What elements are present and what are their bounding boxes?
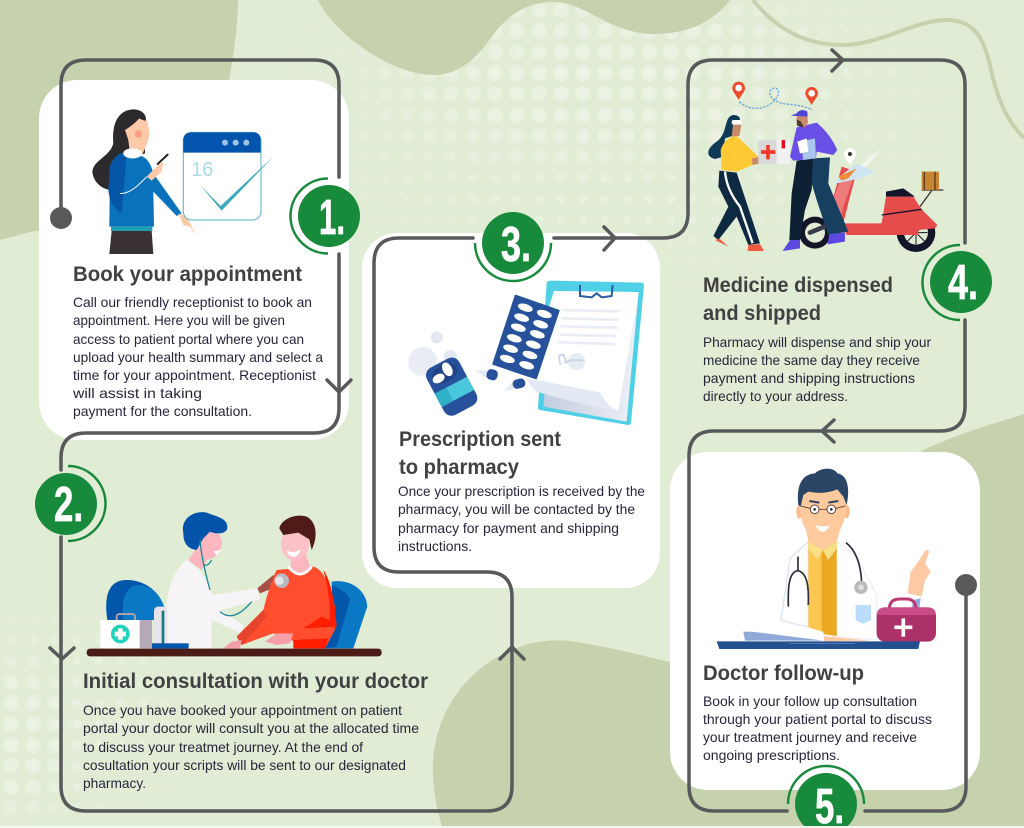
arrow: up to prescription	[500, 647, 524, 659]
panel: step 3 prescription sent to pharmacy	[362, 233, 660, 588]
heading: medicine dispensed and shipped: and shipped	[703, 302, 821, 325]
text: step 4 description: payment and shipping instructions	[703, 371, 915, 386]
text: step 1 description	[72, 295, 323, 419]
icon: doctor examining patient at desk	[87, 512, 382, 656]
badge: step 3: 3.	[501, 218, 531, 272]
text: step 2 description: to discuss your treatmet journey. At the end of	[83, 740, 363, 755]
path end dot	[955, 574, 977, 596]
arrow: step 1 to step 2	[327, 380, 351, 392]
panel: step 1 book your appointment	[39, 80, 349, 440]
text: step 1 description: upload your health summary and select a	[73, 350, 323, 365]
text: step 5 description: your treatment journey and receive	[703, 730, 917, 745]
text: step 1 description: will assist in taking	[72, 386, 202, 401]
badge: step 4: 4.	[948, 256, 978, 310]
text: step 3 description: pharmacy, you will be contacted by the	[398, 502, 635, 517]
arrow: right along step 4	[832, 50, 843, 71]
heading: book your appointment: Book your appointment	[73, 263, 302, 286]
text: step 1 description: appointment. Here you will be given	[73, 313, 285, 328]
text: step 4 description: Pharmacy will dispense and ship your	[703, 335, 931, 350]
text: step 3 description: instructions.	[398, 539, 472, 554]
text: step 2 description: cosultation your scripts will be sent to our designated	[83, 758, 406, 773]
heading: medicine dispensed and shipped	[703, 274, 893, 325]
icon: woman with phone and calendar: 16	[191, 158, 213, 181]
badge: step 2: 2.	[54, 478, 83, 532]
heading: prescription sent to pharmacy: Prescription sent	[399, 428, 561, 451]
text: step 5 description: through your patient portal to discuss	[703, 712, 932, 727]
heading: doctor follow-up: Doctor follow-up	[703, 662, 864, 685]
badge: step 1: 1.	[319, 191, 345, 245]
text: step 5 description: Book in your follow up consultation	[703, 694, 917, 709]
text: step 2 description: pharmacy.	[83, 776, 146, 791]
heading: prescription sent to pharmacy	[399, 428, 561, 479]
heading: medicine dispensed and shipped: Medicine dispensed	[703, 274, 893, 297]
text: step 3 description	[398, 484, 645, 554]
panel: step 5 doctor follow-up	[670, 452, 980, 790]
path start dot	[50, 207, 72, 229]
text: step 5 description	[703, 694, 932, 763]
text: step 2 description: portal your doctor will consult you at the allocated time	[83, 721, 419, 736]
arrow: right to dispensing	[604, 227, 615, 250]
icon: courier handing box from scooter	[708, 82, 943, 252]
text: step 1 description: time for your appointment. Receptionist	[73, 368, 316, 383]
badge: step 1	[290, 178, 360, 254]
text: step 2 description: Once you have booked your appointment on patient	[83, 703, 402, 718]
badge: step 5	[788, 766, 864, 828]
badge: step 2	[35, 466, 106, 541]
text: step 3 description: pharmacy for payment and shipping	[398, 521, 619, 536]
badge: step 4	[922, 245, 992, 320]
heading: initial consultation with your doctor: Initial consultation with your doctor	[83, 670, 428, 693]
text: step 1 description: Call our friendly receptionist to book an	[73, 295, 312, 310]
panel: step 2 initial consultation	[83, 512, 428, 791]
text: step 1 description: access to patient portal where you can	[73, 332, 304, 347]
text: step 4 description: medicine the same day they receive	[703, 353, 920, 368]
text: step 2 description	[83, 703, 419, 791]
panel: step 4 medicine dispensed and shipped	[703, 82, 943, 404]
arrow: down to consultation	[50, 648, 74, 659]
icon: woman with phone and calendar	[92, 109, 273, 254]
text: step 4 description	[703, 335, 931, 404]
text: step 4 description: directly to your address.	[703, 389, 848, 404]
heading: prescription sent to pharmacy: to pharmacy	[399, 456, 519, 479]
badge: step 3	[475, 212, 551, 281]
text: step 3 description: Once your prescription is received by the	[398, 484, 645, 499]
icon: doctor with medical bag	[717, 469, 936, 649]
icon: clipboard, blister pack and pill bottle	[408, 281, 644, 425]
text: step 5 description: ongoing prescriptions.	[703, 748, 840, 763]
text: step 1 description: payment for the consultation.	[73, 404, 252, 419]
arrow: left to follow-up	[822, 420, 834, 442]
